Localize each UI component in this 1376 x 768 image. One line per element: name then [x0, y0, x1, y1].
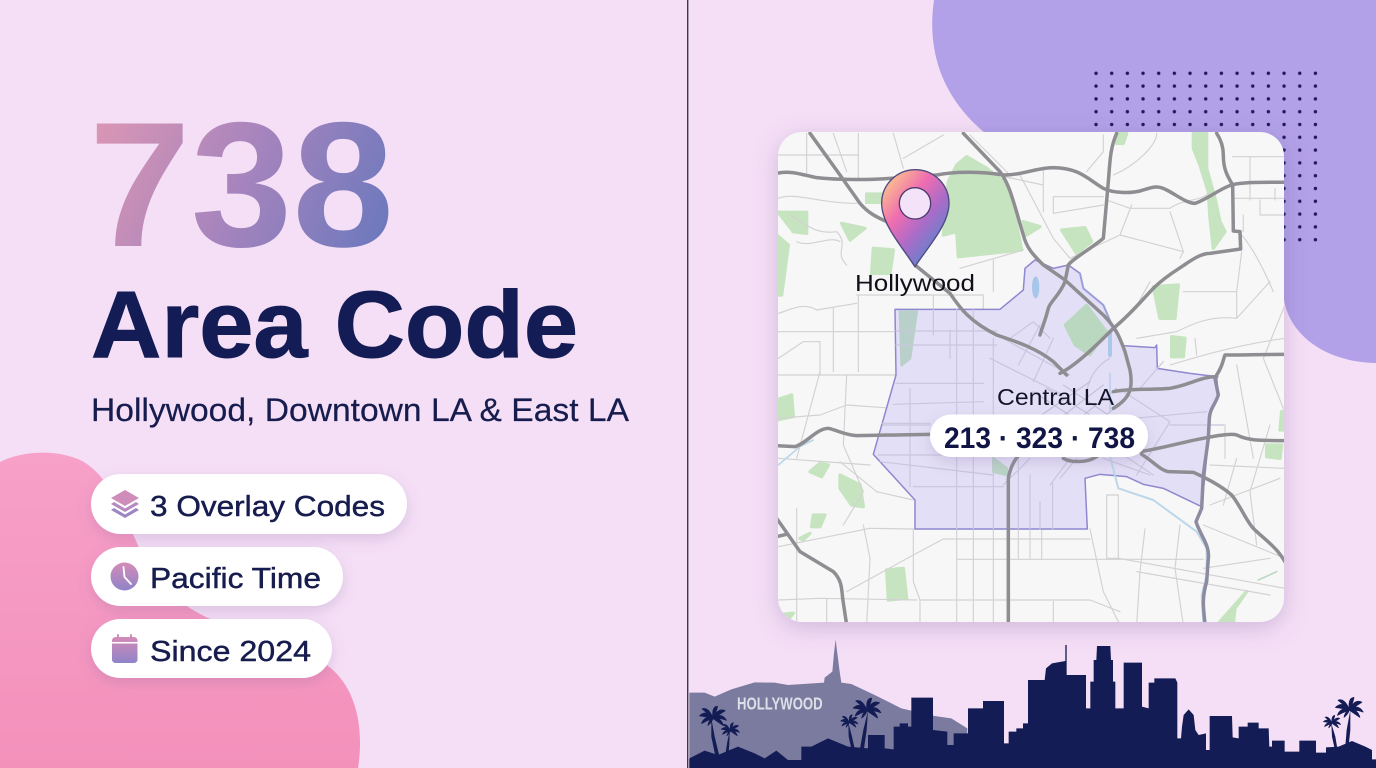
pill: 3 Overlay Codes [91, 474, 407, 534]
palm trees [700, 698, 1363, 756]
pink blob [0, 453, 360, 768]
pill: Pacific Time [91, 547, 343, 606]
divider line [687, 0, 688, 768]
map freeways [777, 133, 1293, 625]
map thin streets outside [778, 133, 1285, 625]
map card [777, 132, 1293, 625]
map parks [777, 133, 1293, 625]
city silhouette [689, 645, 1376, 768]
skyline [689, 639, 1376, 768]
pill: Since 2024: Since 2024 [150, 636, 311, 668]
pill: Pacific Time: Pacific Time [150, 563, 321, 595]
hollywood sign: HOLLYWOOD [737, 693, 823, 713]
map parks in area [900, 305, 1107, 475]
big number 738: 738 [89, 85, 394, 284]
icon: calendar [112, 634, 138, 663]
subtitle: Hollywood, Downtown LA & East LA [91, 392, 630, 428]
overlay codes pill: 213 · 323 · 738 [944, 422, 1135, 455]
map freeway east [1196, 378, 1218, 623]
pill: Since 2024 [91, 619, 332, 678]
map area 738 [873, 260, 1218, 529]
map water [778, 273, 1277, 623]
icon: clock [110, 562, 138, 590]
icon: layers [111, 490, 139, 518]
map label: Central LA: Central LA [997, 384, 1114, 410]
dot grid [1088, 66, 1324, 246]
feature pills [91, 474, 407, 678]
pill: 3 Overlay Codes: 3 Overlay Codes [150, 491, 385, 523]
Hollywood hills [689, 639, 967, 768]
map pin: Hollywood [882, 170, 949, 267]
map label: Hollywood: Hollywood [855, 270, 975, 296]
purple blob [932, 0, 1376, 363]
map downtown grid [1032, 381, 1118, 414]
title: Area Code: Area Code [91, 272, 578, 378]
map thin streets in area [878, 309, 1223, 529]
